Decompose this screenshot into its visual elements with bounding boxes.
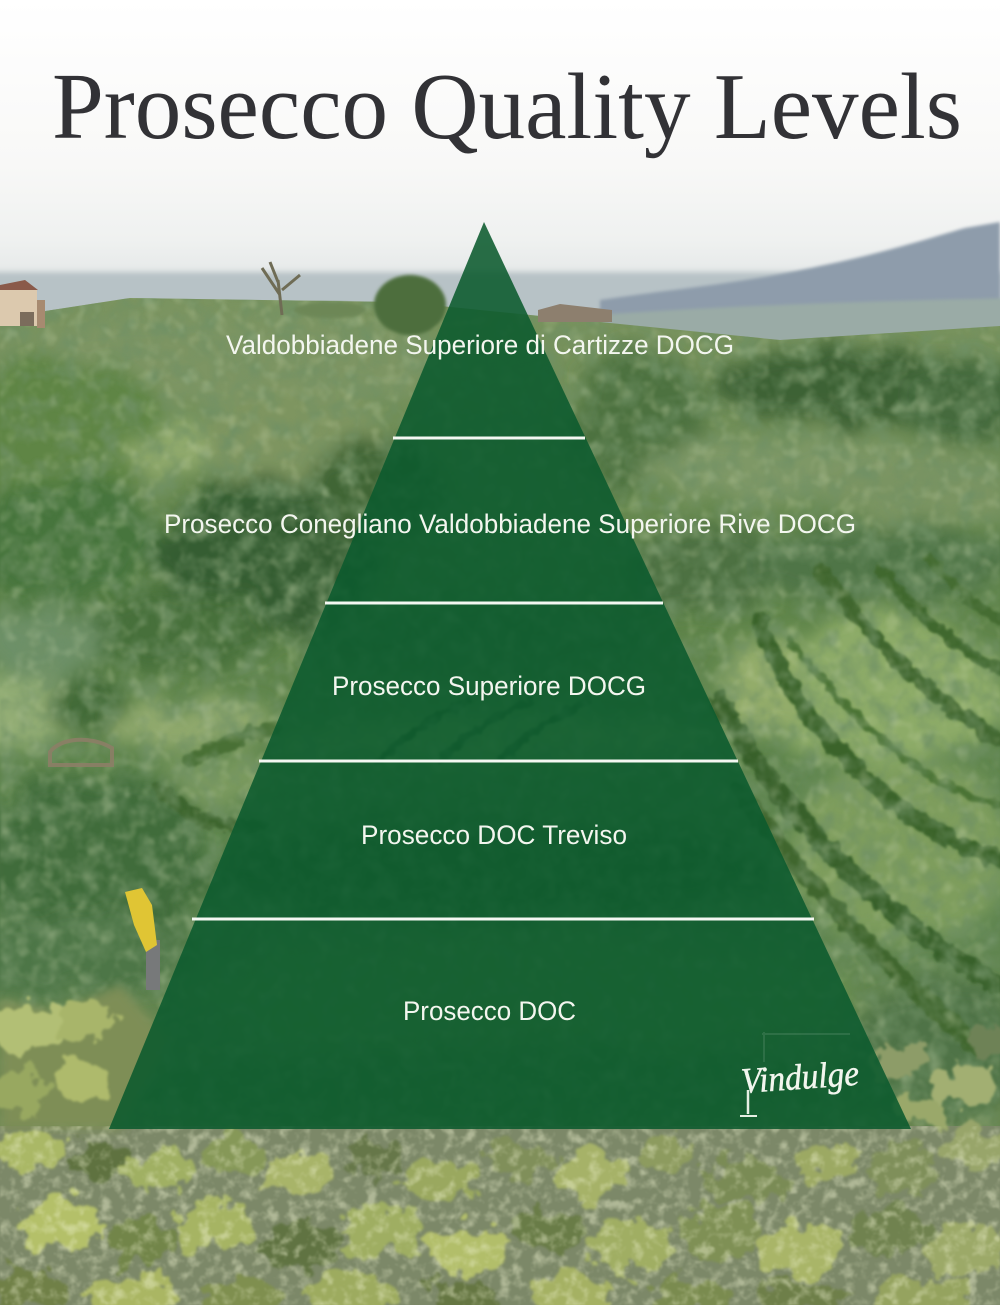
title: Prosecco Quality Levels <box>52 55 962 159</box>
pyramid shape <box>109 222 911 1129</box>
background: farmhouse left <box>0 280 45 328</box>
logo wordmark: Vindulge <box>740 1053 860 1101</box>
background: sky <box>0 0 1000 300</box>
tier 1 label: Valdobbiadene Superiore di Cartizze DOCG <box>226 330 734 360</box>
divider: tier 3 <box>259 760 738 762</box>
icon: wine glass <box>740 1032 850 1116</box>
background: leaf texture <box>0 1126 1000 1305</box>
background: bare tree and bushes on the ridge <box>262 262 446 335</box>
tier 5 label: Prosecco DOC <box>403 996 576 1026</box>
background: vine rows <box>160 560 1000 1050</box>
background: structure frame in field <box>50 740 112 765</box>
background: farmhouse centre <box>538 304 612 322</box>
background: foreground vine leaves <box>0 985 1000 1305</box>
background: foliage texture <box>0 290 1000 1160</box>
divider: tier 2 <box>325 602 663 604</box>
quality pyramid <box>109 222 911 1129</box>
background: yellow cloth on post <box>125 888 160 990</box>
logo: Vindulge <box>740 1032 860 1116</box>
background: vineyard hillside <box>0 262 1000 1160</box>
tier 3 label: Prosecco Superiore DOCG <box>332 671 646 701</box>
tier 2 label: Prosecco Conegliano Valdobbiadene Superiore Rive DOCG <box>164 509 856 539</box>
divider: tier 1 <box>393 436 585 440</box>
tier 4 label: Prosecco DOC Treviso <box>361 820 627 850</box>
divider: tier 4 <box>192 918 814 920</box>
background: light foliage texture <box>0 290 1000 1160</box>
background: distant plain and mountain <box>0 222 1000 350</box>
